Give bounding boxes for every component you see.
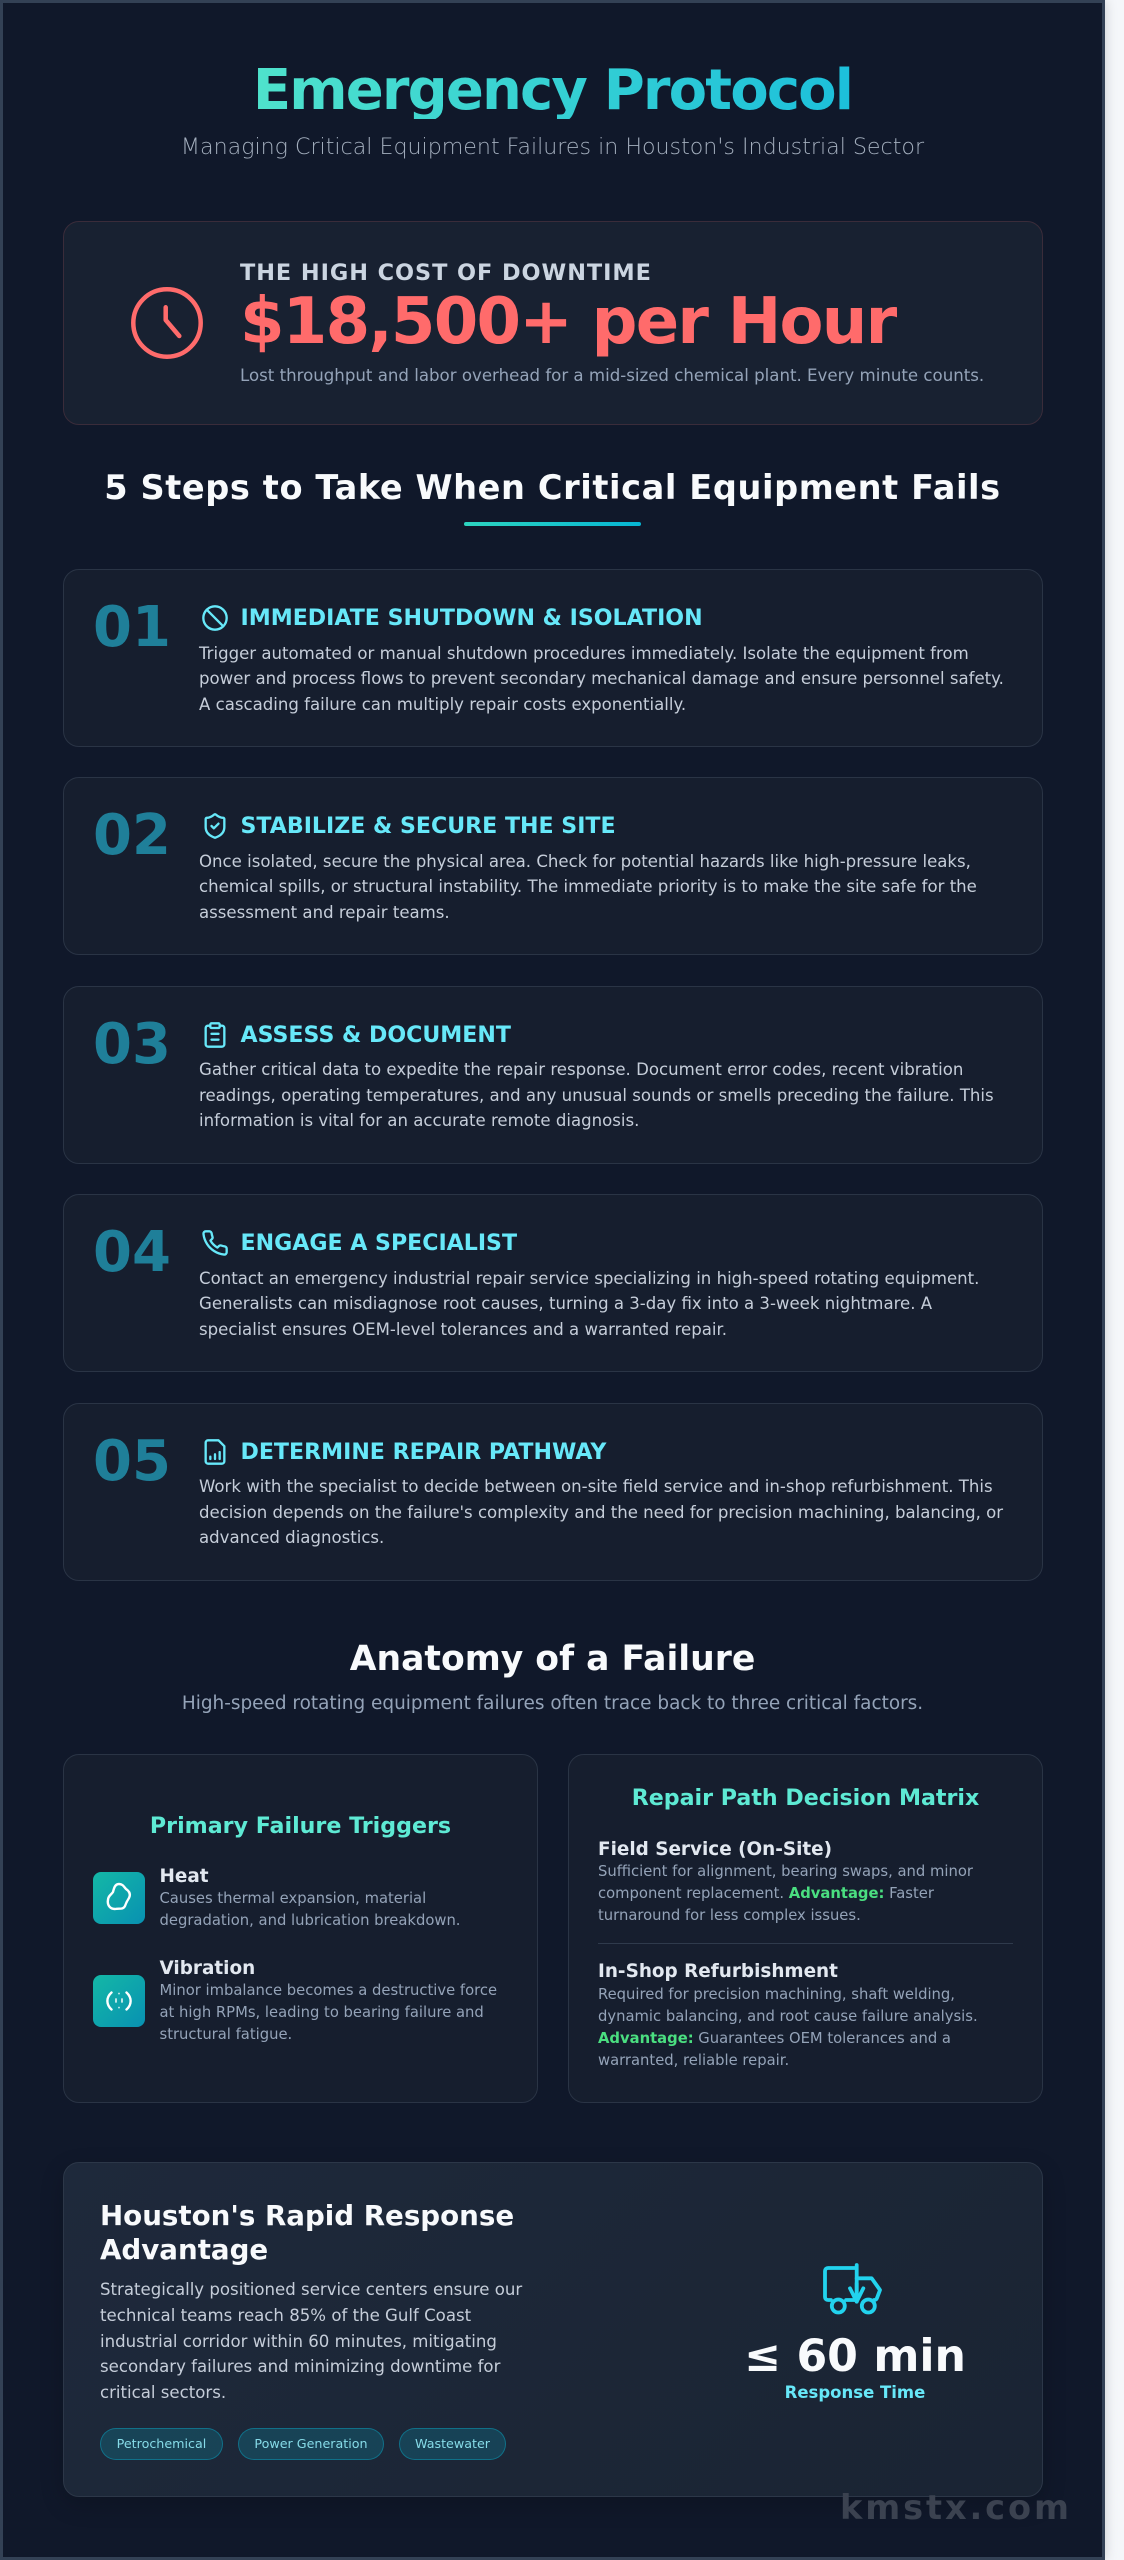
step text xyxy=(199,1269,979,1339)
trigger: vibration text: Minor imbalance becomes a destructive force xyxy=(160,1982,497,1999)
trigger: heat title: Heat xyxy=(160,1866,209,1887)
icon: file chart xyxy=(204,1439,226,1465)
trigger: vibration text: structural fatigue. xyxy=(160,2026,292,2043)
step title: ASSESS & DOCUMENT xyxy=(240,1022,511,1048)
panel: primary failure triggers xyxy=(63,1754,538,2103)
panel text: secondary failures and minimizing downtime for xyxy=(100,2357,500,2376)
panel heading: Primary Failure Triggers xyxy=(150,1813,451,1839)
panel heading: Houston's Rapid Response xyxy=(100,2199,514,2232)
panel heading: Repair Path Decision Matrix xyxy=(632,1785,979,1811)
icon: clock xyxy=(131,287,203,359)
tag: wastewater xyxy=(399,2428,506,2460)
anatomy intro: High-speed rotating equipment failures often trace back to three critical factors. xyxy=(182,1693,923,1714)
panel text xyxy=(100,2280,522,2402)
panel: repair path decision matrix xyxy=(568,1754,1043,2103)
step text xyxy=(198,644,1004,714)
step text: advanced diagnostics. xyxy=(199,1528,384,1547)
option: field service text: component replacement. Advantage: Faster xyxy=(598,1885,934,1902)
panel: cost of downtime xyxy=(63,221,1043,425)
trigger: vibration text xyxy=(160,1982,497,2043)
step text: power and process flows to prevent secondary mechanical damage and ensure personnel safety. xyxy=(199,669,1004,688)
step number: 04 xyxy=(93,1220,171,1285)
tag: power generation: Power Generation xyxy=(254,2436,368,2451)
icon: heat xyxy=(93,1872,145,1924)
icon: phone xyxy=(202,1230,228,1256)
option: field service text xyxy=(598,1863,973,1924)
option: field service title: Field Service (On-Site) xyxy=(598,1839,832,1860)
step text: Trigger automated or manual shutdown procedures immediately. Isolate the equipment from xyxy=(199,644,969,662)
step text xyxy=(199,852,977,922)
icon: shield check xyxy=(204,813,226,839)
step text: Generalists can misdiagnose root causes, turning a 3-day fix into a 3-week nightmare. A xyxy=(199,1294,932,1313)
panel text: industrial corridor within 60 minutes, mitigating xyxy=(100,2332,497,2351)
panel heading xyxy=(100,2199,514,2266)
tag: wastewater: Wastewater xyxy=(415,2436,490,2451)
trigger: vibration title: Vibration xyxy=(160,1958,255,1979)
watermark: kmstx.com xyxy=(840,2488,1072,2527)
option: field service text: Sufficient for alignment, bearing swaps, and minor xyxy=(598,1863,973,1880)
step text: readings, operating temperatures, and any unusual sounds or smells preceding the failure. This xyxy=(199,1086,994,1105)
step text: assessment and repair teams. xyxy=(199,903,450,922)
step title: IMMEDIATE SHUTDOWN & ISOLATION xyxy=(240,605,703,631)
step number: 03 xyxy=(93,1012,171,1077)
step text: Once isolated, secure the physical area. Check for potential hazards like high-pressure leaks, xyxy=(199,852,971,871)
tag: petrochemical: Petrochemical xyxy=(117,2436,206,2451)
step number: 01 xyxy=(93,595,171,660)
option: in-shop text: warranted, reliable repair. xyxy=(598,2052,789,2069)
tag: power generation xyxy=(238,2428,384,2460)
step text: decision depends on the failure's complexity and the need for precision machining, balancing, or xyxy=(199,1503,1003,1522)
step text: chemical spills, or structural instability. The immediate priority is to make the site safe for the xyxy=(199,877,977,896)
panel: step 1 xyxy=(63,569,1043,747)
panel: step 5 xyxy=(63,1403,1043,1581)
option: field service text: turnaround for less complex issues. xyxy=(598,1907,861,1924)
step text xyxy=(199,1060,994,1130)
response figure: ≤ 60 min xyxy=(744,2331,966,2382)
icon: vibration xyxy=(93,1975,145,2027)
option: in-shop text xyxy=(598,1986,978,2069)
title xyxy=(0,63,1105,119)
step title: DETERMINE REPAIR PATHWAY xyxy=(240,1439,606,1465)
option: in-shop text: Advantage: Guarantees OEM tolerances and a xyxy=(598,2030,951,2047)
step text: Contact an emergency industrial repair service specializing in high-speed rotating equipment. xyxy=(199,1269,979,1288)
step number: 02 xyxy=(93,803,171,868)
response label: Response Time xyxy=(785,2383,925,2402)
divider xyxy=(598,1943,1013,1944)
tags xyxy=(100,2428,506,2460)
tag: petrochemical xyxy=(100,2428,223,2460)
cost label: THE HIGH COST OF DOWNTIME xyxy=(240,260,652,286)
panel text: Strategically positioned service centers ensure our xyxy=(100,2280,522,2299)
cost figure: $18,500+ per Hour xyxy=(240,285,895,359)
heading underline xyxy=(464,522,641,526)
panel: rapid response advantage xyxy=(63,2162,1043,2497)
step text: A cascading failure can multiply repair costs exponentially. xyxy=(199,695,686,714)
title: Emergency Protocol xyxy=(253,58,852,123)
panel text: critical sectors. xyxy=(100,2383,226,2402)
step title: ENGAGE A SPECIALIST xyxy=(240,1230,517,1256)
heading: anatomy of a failure: Anatomy of a Failure xyxy=(350,1639,755,1679)
cost note: Lost throughput and labor overhead for a mid-sized chemical plant. Every minute counts. xyxy=(240,366,984,385)
trigger: heat text xyxy=(160,1890,461,1929)
step title: STABILIZE & SECURE THE SITE xyxy=(240,813,616,839)
option: in-shop text: dynamic balancing, and root cause failure analysis. xyxy=(598,2008,978,2025)
icon: clipboard xyxy=(204,1022,226,1048)
step text: information is vital for an accurate remote diagnosis. xyxy=(199,1111,639,1130)
step text: Work with the specialist to decide between on-site field service and in-shop refurbishment. This xyxy=(199,1477,993,1496)
option: in-shop title: In-Shop Refurbishment xyxy=(598,1961,838,1982)
trigger: heat text: degradation, and lubrication breakdown. xyxy=(160,1912,461,1929)
icon: ban xyxy=(202,605,228,631)
panel text: technical teams reach 85% of the Gulf Coast xyxy=(100,2306,471,2325)
step text: Gather critical data to expedite the repair response. Document error codes, recent vibration xyxy=(199,1060,963,1079)
panel: step 2 xyxy=(63,777,1043,955)
step text xyxy=(199,1477,1004,1547)
step number: 05 xyxy=(93,1429,171,1494)
panel: step 4 xyxy=(63,1194,1043,1372)
trigger: heat text: Causes thermal expansion, material xyxy=(160,1890,426,1907)
option: in-shop text: Required for precision machining, shaft welding, xyxy=(598,1986,955,2003)
panel: step 3 xyxy=(63,986,1043,1164)
heading: 5 steps: 5 Steps to Take When Critical Equipment Fails xyxy=(104,468,1001,507)
icon: truck xyxy=(823,2263,882,2314)
step text: specialist ensures OEM-level tolerances and a warranted repair. xyxy=(199,1320,727,1339)
panel heading: Advantage xyxy=(100,2232,268,2266)
subtitle: Managing Critical Equipment Failures in Houston's Industrial Sector xyxy=(181,134,924,160)
trigger: vibration text: at high RPMs, leading to bearing failure and xyxy=(160,2004,484,2021)
